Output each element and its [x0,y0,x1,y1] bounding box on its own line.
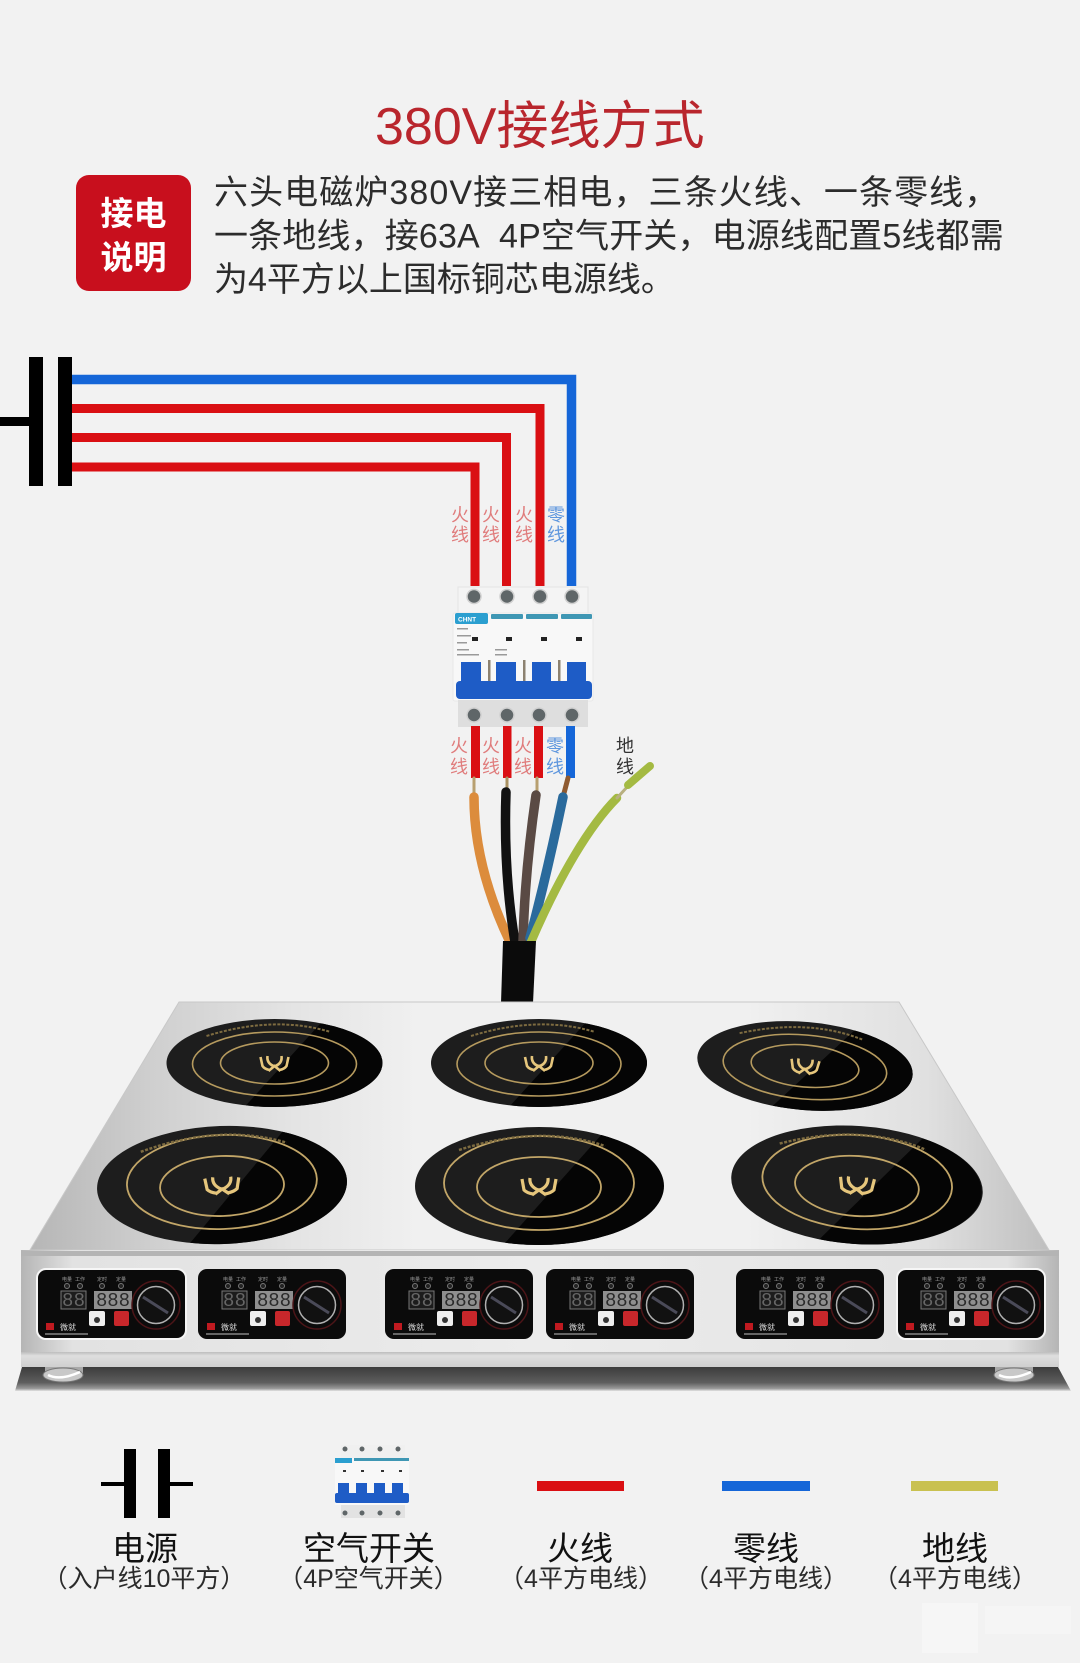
upper wire labels: 线 [482,525,500,545]
cooker shadow [15,1367,1071,1391]
cable sheath [501,941,536,1003]
lower wire labels: 零 [546,736,564,756]
air switch 4P breaker: CHNT [458,616,476,624]
control panel 5: 工作 [774,1276,784,1283]
control panel 1: 电量 [62,1276,72,1283]
legend: live wire: （4平方电线） [499,1565,663,1593]
control panel 1: 888 [96,1290,130,1312]
control panel 2: 电量 [223,1276,233,1283]
control panel 3: 电量 [410,1276,420,1283]
upper wire labels [451,505,565,545]
badge: 接电说明 [76,175,191,291]
live wire 3 (red) [72,467,475,586]
legend: live wire: 火线 [547,1530,613,1567]
ground wire label: 线 [616,757,634,777]
control panel 5: 定时 [796,1276,806,1283]
legend: air switch [278,1445,459,1593]
control panel 5: 定量 [815,1276,825,1283]
upper wire labels: 零 [547,505,565,525]
legend: neutral wire [684,1481,848,1593]
burner: back middle [431,1019,647,1107]
legend: neutral wire: 零线 [733,1530,799,1567]
control panel 2: 888 [257,1290,291,1312]
legend: air switch: 空气开关 [303,1530,435,1567]
burner: front right [731,1126,983,1244]
control panel 3: 工作 [423,1276,433,1283]
cooker front face [21,1250,1059,1367]
control panel 3 [385,1269,533,1339]
right foot [994,1362,1034,1382]
lower wire labels: 线 [450,757,468,777]
title: 380V接线方式 [375,98,704,156]
air switch 4P breaker [453,587,593,727]
upper wire labels: 火 [482,505,500,525]
legend: ground wire: 地线 [922,1530,988,1567]
legend: air switch: （4P空气开关） [278,1565,459,1593]
watermark [922,1603,1071,1653]
control panel 1 [37,1269,186,1339]
control panel 3: 888 [444,1290,478,1312]
upper wire labels: 线 [547,525,565,545]
control panel 4: 定时 [606,1276,616,1283]
control panel 3: 定时 [445,1276,455,1283]
control panel 5: 88 [761,1290,784,1312]
legend: neutral wire: （4平方电线） [684,1565,848,1593]
control panel 6: 88 [922,1290,945,1312]
control panel 6: 工作 [935,1276,945,1283]
control panel 1: 定时 [97,1276,107,1283]
lower wire segments [471,726,575,778]
control panel 2: 微就 [221,1322,237,1332]
control panel 2 [198,1269,346,1339]
upper wire labels: 线 [451,525,469,545]
lower wire labels: 线 [514,757,532,777]
live wire 2 (red) [72,438,506,586]
icon: power symbol [101,1449,193,1518]
control panel 1: 微就 [60,1322,76,1332]
legend: live wire [499,1481,663,1593]
badge: 接电说明: 说明 [100,239,166,276]
control panel 4: 888 [605,1290,639,1312]
control panel 4: 工作 [584,1276,594,1283]
control panel 6: 电量 [922,1276,932,1283]
lower wire labels [450,736,564,777]
burner: front left [97,1126,347,1244]
description text [214,174,1004,299]
burner: back right [697,1021,913,1111]
control panel 4: 微就 [569,1322,585,1332]
control panel 6 [897,1269,1045,1339]
upper wire labels: 火 [515,505,533,525]
lower wire labels: 火 [482,736,500,756]
legend: ground wire: （4平方电线） [873,1565,1037,1593]
icon: mini breaker [335,1445,409,1518]
ground wire label [616,736,634,777]
control panel 4: 定量 [625,1276,635,1283]
legend: power source: 电源 [112,1530,178,1567]
lower wire labels: 线 [546,757,564,777]
control panel 3: 定量 [464,1276,474,1283]
burner: back left [166,1019,382,1107]
control panel 6: 定量 [976,1276,986,1283]
description text: 为4平方以上国标铜芯电源线。 [214,261,675,299]
control panel 4: 电量 [571,1276,581,1283]
control panel 3: 微就 [408,1322,424,1332]
five-core power cable [474,766,650,942]
control panel 6: 定时 [957,1276,967,1283]
lower wire labels: 火 [450,736,468,756]
control panel 1: 定量 [116,1276,126,1283]
upper wire labels: 火 [451,505,469,525]
cooker top surface [30,1002,1049,1250]
lower wire labels: 火 [514,736,532,756]
left foot [43,1362,83,1382]
control panel 2: 定时 [258,1276,268,1283]
control panel 2: 88 [223,1290,246,1312]
control panel 2: 工作 [236,1276,246,1283]
description text: 一条地线，接63A 4P空气开关，电源线配置5线都需 [214,218,1004,256]
control panel 6: 微就 [920,1322,936,1332]
legend: power source: （入户线10平方） [43,1565,245,1593]
lower wire labels: 线 [482,757,500,777]
legend: ground wire [873,1481,1037,1593]
upper wire labels: 线 [515,525,533,545]
control panel 6: 888 [956,1290,990,1312]
control panel 2: 定量 [277,1276,287,1283]
control panel 5: 888 [795,1290,829,1312]
control panel 5 [736,1269,884,1339]
control panel 4 [546,1269,694,1339]
power source symbol [0,357,72,486]
badge: 接电说明: 接电 [100,195,166,232]
control panel 1: 88 [62,1290,85,1312]
ground wire label: 地 [616,736,634,756]
burner: front middle [415,1127,664,1245]
control panel 5: 微就 [759,1322,775,1332]
description text: 六头电磁炉380V接三相电，三条火线、一条零线， [214,174,999,212]
legend: power source [43,1449,245,1593]
control panel 1: 工作 [75,1276,85,1283]
control panel 3: 88 [410,1290,433,1312]
live wire 1 (red) [72,408,540,586]
neutral wire (blue) [72,380,572,586]
control panel 4: 88 [571,1290,594,1312]
control panel 5: 电量 [761,1276,771,1283]
